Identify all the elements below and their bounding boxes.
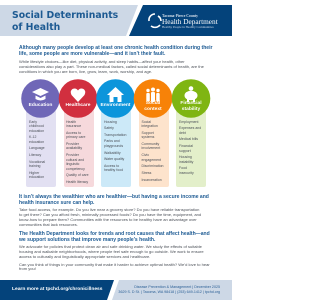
list: education: childhood [29, 124, 44, 128]
list: healthcare [66, 120, 89, 184]
list: healthcare: cultural and [66, 158, 84, 162]
list: environment: Housing [104, 120, 117, 124]
list: environment: Transportation [104, 133, 126, 137]
list: financial stability: Housing [179, 155, 192, 159]
list: financial stability [179, 120, 201, 175]
list: social context: engagement [142, 158, 161, 162]
list: social context: Civic [142, 153, 149, 157]
panel: environment [101, 100, 131, 187]
heading: income and insurance: health insurance sure can help. [19, 200, 94, 206]
list: education: education [29, 140, 44, 144]
list: healthcare: availability [66, 146, 82, 150]
list: environment [104, 120, 126, 172]
icon: heart [71, 88, 85, 102]
list: social context: Community [142, 142, 159, 146]
title: of Health [12, 22, 60, 33]
list: healthcare: Health literacy [66, 180, 88, 184]
heading: health department: we support solutions that improve many people’s health. [19, 237, 155, 243]
text: food access [19, 207, 201, 227]
list: financial stability: insecurity [179, 171, 194, 175]
list: education: Early [29, 120, 37, 124]
footer info: Disease Prevention & Management | December 2025 [134, 285, 220, 289]
circle label: education: Education [29, 103, 52, 108]
logo text: Healthy People in Healthy Communities [162, 25, 214, 29]
list: social context: integration [142, 124, 158, 128]
list: education: training [29, 164, 40, 168]
list: education: Higher [29, 171, 39, 175]
list: social context: Incarceration [142, 178, 162, 182]
list: social context: Social [142, 120, 151, 124]
circle label: social context [144, 100, 162, 112]
list: education: K-12 [29, 135, 36, 139]
list: education: education [29, 175, 44, 179]
footer info: 3629 S. D St. | Tacoma, WA 98418 | (253) 649-1412 | tpchd.org [118, 290, 220, 294]
intro text: considerations also play a part. These non-medical factors, called social determinants of health, are the [19, 64, 204, 69]
logo text: Health Department [162, 16, 218, 26]
title banner [0, 5, 232, 36]
circle label: financial stability [180, 100, 202, 112]
text: policies: We advocate for policies that protect clean air and safe drinking water. We study the effects of suitable [19, 244, 202, 249]
list: environment: Water quality [104, 157, 124, 161]
heading: health department: The Health Department looks for trends and root causes that affect health—and [19, 231, 210, 237]
footer link: Learn more at tpchd.org/chronicillness [12, 287, 102, 292]
text: food access: Take food access, for example. Do you live near a grocery store? Do you have reliable transportation [19, 207, 199, 212]
icon: piggy bank [184, 86, 198, 102]
list: healthcare: primary care [66, 135, 85, 139]
list: healthcare: linguistic [66, 162, 79, 166]
list: healthcare: Access to [66, 131, 81, 135]
list: financial stability: Medical bills [179, 137, 198, 141]
circle label: environment: Environment [101, 103, 130, 108]
list: social context: systems [142, 135, 154, 139]
title: Social Determinants [12, 10, 118, 21]
logo text: Tacoma-Pierce County [162, 14, 198, 18]
list: social context: Support [142, 131, 154, 135]
list: financial stability: debt [179, 131, 186, 135]
list: social context [142, 120, 164, 182]
circles [21, 79, 210, 118]
text: policies: access to culturally and linguistically appropriate services and healthcare. [19, 254, 150, 259]
list: environment: Parks and [104, 139, 120, 143]
icon: graduation cap [32, 88, 49, 100]
intro text: While lifestyle choices—like diet, physical activity, and sleep habits—affect your health, other [19, 59, 185, 64]
list: social context: Discrimination [142, 164, 163, 168]
list: healthcare: competency [66, 167, 85, 171]
intro text: conditions in which you are born, live, grow, learn, work, worship, and age. [19, 69, 152, 74]
heading: income and insurance: It isn’t always the wealthier who are healthier—but having a secure income and [19, 194, 209, 200]
list: environment: playgrounds [104, 144, 123, 148]
circle label: financial stability: Financial [180, 101, 202, 106]
intro text [19, 59, 204, 74]
list: environment: healthy food [104, 168, 123, 172]
list: healthcare: Provider [66, 142, 79, 146]
heading: health department [19, 231, 210, 243]
list: education: Language [29, 146, 45, 150]
list: environment: Access to [104, 164, 119, 168]
intro heading: Although many people develop at least one chronic health condition during their [19, 45, 212, 51]
list: financial stability: Expenses and [179, 126, 201, 130]
circle label: social context: context [144, 107, 162, 112]
circle label: social context: Social [146, 101, 160, 106]
text: policies: housing and walkable neighborhoods, where people feel safe enough to go outside. We work to ensure [19, 249, 204, 254]
icon: logo swirl [148, 13, 162, 28]
text: policies [19, 244, 204, 259]
list: education [29, 120, 45, 179]
list: education: Literacy [29, 153, 41, 157]
list: healthcare: Provider [66, 153, 79, 157]
panel: social context [139, 100, 169, 187]
list: healthcare: Quality of care [66, 173, 89, 177]
panel: financial stability [176, 100, 206, 187]
panel: healthcare [64, 100, 94, 187]
intro heading [19, 45, 212, 57]
list: environment: Safety [104, 126, 114, 130]
text: closing question: from you! [19, 266, 36, 271]
intro heading: life, some people are more vulnerable—and it isn’t their fault. [19, 51, 165, 57]
list: financial stability: Financial [179, 144, 193, 148]
list: education: education [29, 129, 44, 133]
logo text [162, 14, 218, 29]
list: financial stability: Food [179, 166, 187, 170]
title [12, 10, 118, 33]
list: environment: Walkability [104, 151, 121, 155]
list: social context: Stress [142, 171, 151, 175]
list: education: Vocational [29, 160, 45, 164]
list: financial stability: Employment [179, 120, 198, 124]
list: financial stability: support [179, 149, 191, 153]
list: social context: involvement [142, 146, 160, 150]
footer info [118, 285, 220, 294]
footer banner [0, 280, 232, 300]
list: healthcare: insurance [66, 124, 81, 128]
circle label: financial stability: stability [182, 107, 200, 112]
circle label: healthcare: Healthcare [65, 103, 90, 108]
text: closing question: Can you think of things in your community that make it harder to achieve optimal health? We’d love to hear [19, 262, 210, 267]
text: food access: to get there? Can you afford fresh, minimally processed foods? Do you have the time, equipment, and [19, 212, 201, 217]
text: food access: communities that lack resources. [19, 222, 78, 227]
heading: income and insurance [19, 194, 209, 206]
text: food access: know-how to prepare them? Communities with the resources to be healthy have an advantage over [19, 217, 197, 222]
icon: house [107, 87, 124, 102]
list: financial stability: instability [179, 160, 193, 164]
list: healthcare: Health [66, 120, 76, 124]
panel: education [26, 100, 56, 187]
icon: people [146, 88, 160, 102]
logo: health department [148, 13, 218, 29]
text: closing question [19, 262, 210, 271]
